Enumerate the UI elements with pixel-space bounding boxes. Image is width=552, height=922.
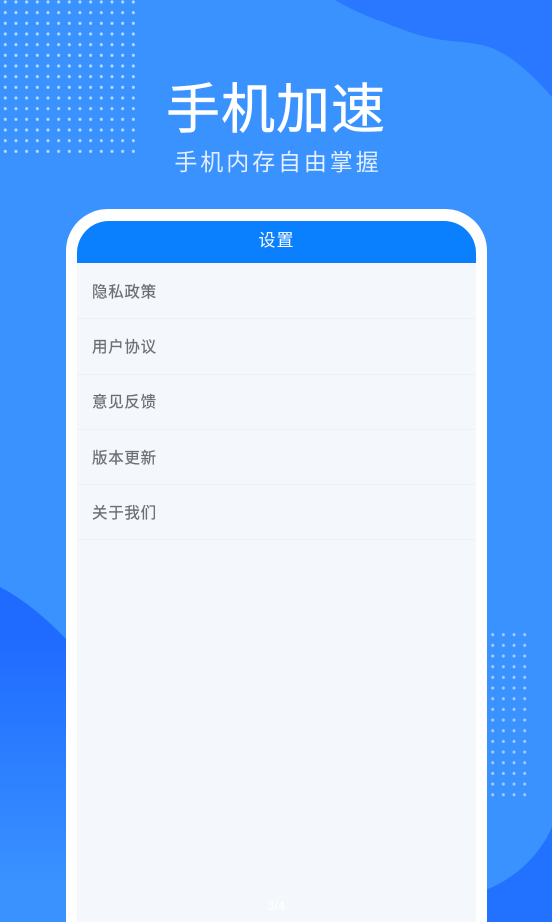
list item: feedback [77, 375, 476, 430]
list item: user agreement: 用户协议 [92, 339, 157, 356]
list item: privacy policy: 隐私政策 [92, 284, 157, 301]
list item: version update: 版本更新 [92, 450, 157, 467]
list item: privacy policy [77, 264, 476, 319]
list item: feedback: 意见反馈 [92, 394, 157, 411]
list item: about us: 关于我们 [92, 505, 157, 522]
list item: about us [77, 485, 476, 540]
subtitle: 手机内存自由掌握 [174, 149, 382, 175]
header bar: 设置 [258, 231, 294, 250]
list item: user agreement [77, 319, 476, 375]
panel: phone settings screen [66, 209, 487, 922]
header bar [77, 221, 476, 263]
title: 手机加速 [166, 80, 386, 140]
screen content [77, 221, 476, 922]
page indicator: 3/4 [267, 898, 285, 913]
list item: version update [77, 430, 476, 485]
